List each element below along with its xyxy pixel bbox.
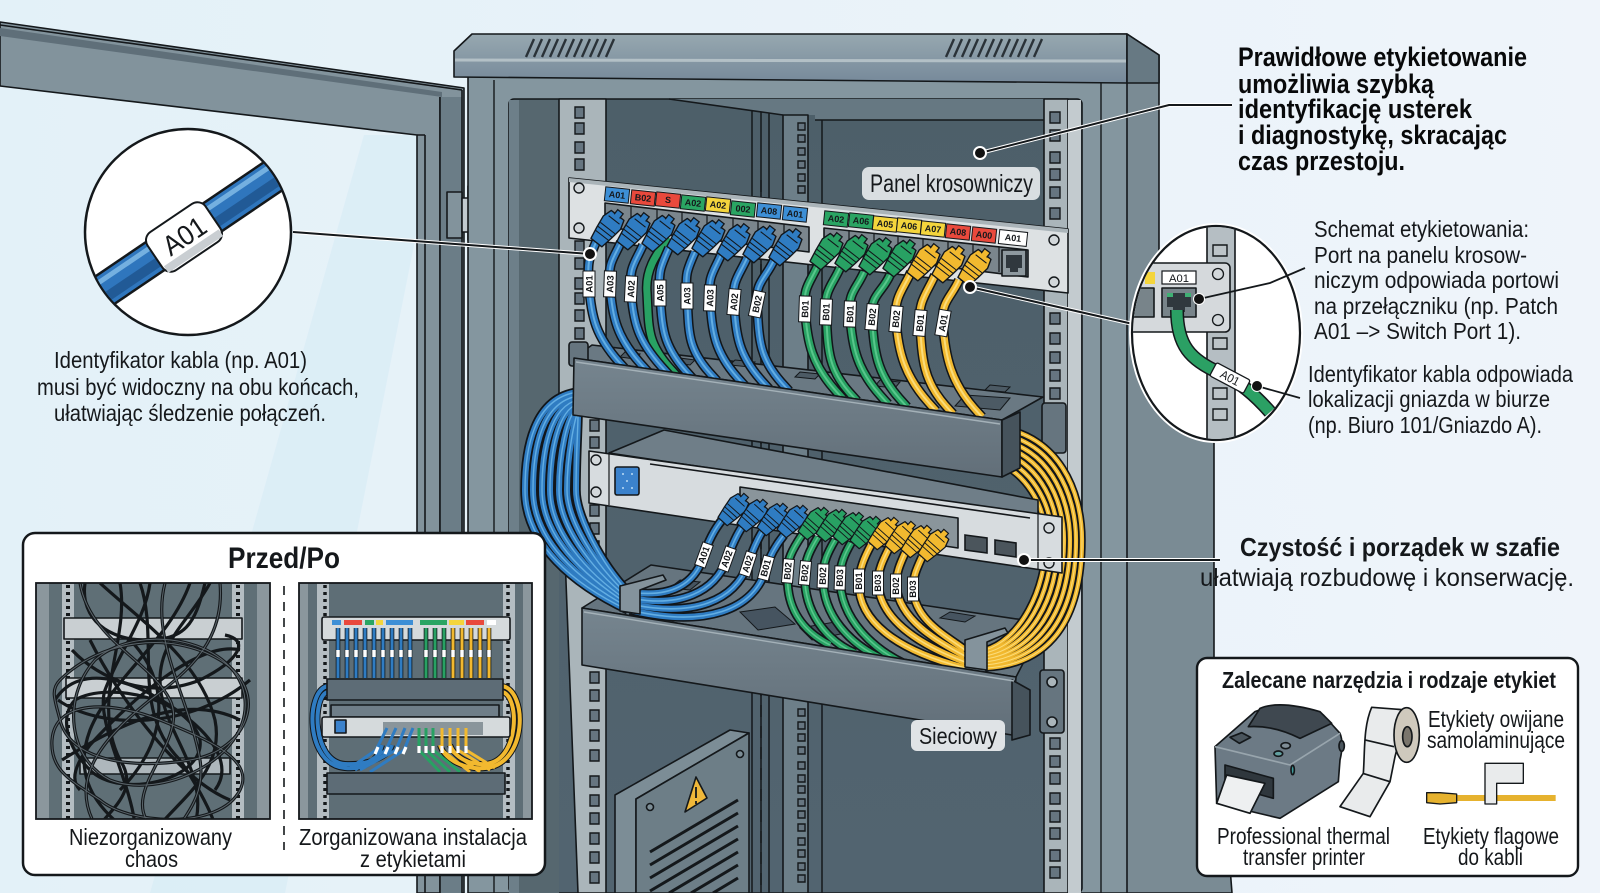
cable labels on switch cables: A02 (719, 549, 736, 569)
caption: after: z etykietami (360, 846, 466, 872)
heading: proper labelling: Prawidłowe etykietowanie (1238, 42, 1527, 72)
upper cable manager tray (574, 345, 1043, 420)
port block (824, 228, 1028, 277)
patch cables: yellow (896, 272, 982, 417)
port labels: A01 (786, 208, 804, 220)
switch cables: yellow (859, 545, 965, 668)
port labels: A06 (852, 215, 870, 227)
cable labels on patch cables: A01 (584, 275, 595, 293)
cable labels on patch cables: B01 (915, 313, 927, 332)
patch cables: green (805, 265, 907, 407)
text: labelling scheme (1314, 216, 1559, 344)
text: cleanliness note: Czystość i porządek w szafie (1240, 532, 1560, 562)
cable labels on switch cables: B01 (854, 572, 865, 590)
yellow cable bundle (985, 428, 1082, 668)
caption: flag labels (1423, 823, 1559, 870)
cable labels on patch cables (583, 271, 952, 337)
cabinet top cap with vents (454, 34, 1159, 83)
cable labels on switch cables: B03 (908, 580, 919, 598)
cable strap left (620, 575, 666, 614)
cable labels on switch cables: A02 (741, 554, 756, 574)
text: cable identifier note: ułatwiając śledzenie połączeń. (54, 400, 326, 426)
heading: proper labelling: identyfikację usterek (1238, 94, 1473, 124)
caption: printer (1217, 823, 1390, 870)
heading: proper labelling (1238, 42, 1527, 176)
cable labels on patch cables: B02 (751, 295, 765, 314)
arrow: cable ID zoom leader (293, 232, 596, 260)
network switch top (609, 430, 1038, 517)
cable labels on patch cables: A03 (682, 287, 693, 305)
cable labels on switch cables: B03 (835, 569, 846, 587)
icon: flag label on cable (1427, 763, 1556, 804)
cable labels on switch cables: B03 (873, 574, 884, 592)
cable strap right (965, 628, 1008, 670)
blue cable bundle (525, 392, 628, 610)
port labels: A02 (827, 213, 845, 225)
cable labels on switch cables: A01 (696, 544, 713, 565)
port labels: A06 (900, 220, 918, 232)
port tag: A01 (1169, 273, 1189, 285)
cable labels on switch cables: B02 (799, 564, 812, 582)
glass door reflection (150, 135, 417, 893)
cable sleeve (142, 198, 226, 276)
port block (605, 203, 809, 252)
cable labels on patch cables: B01 (845, 304, 857, 323)
cable labels on switch cables: B02 (891, 577, 902, 595)
cable tag: A01 (1218, 367, 1242, 389)
cable labels on patch cables: A02 (729, 293, 741, 311)
text: cable identifier mapping: lokalizacji gniazda w biurze (1308, 386, 1550, 412)
port labels (604, 187, 1028, 246)
patch panel (569, 178, 1068, 293)
caption: before: chaos (125, 846, 178, 872)
label: Panel krosowniczy: Panel krosowniczy (870, 170, 1033, 198)
caption: flag labels: do kabli (1458, 844, 1523, 870)
power unit with warning sign (615, 730, 749, 893)
image: organized rack (299, 583, 532, 819)
callout circle: cable label detail (76, 129, 306, 335)
port labels: A07 (924, 223, 942, 235)
arrow: port leader (1194, 268, 1305, 304)
caption: after: Zorganizowana instalacja (299, 824, 527, 850)
cable labels on patch cables: B01 (800, 299, 812, 318)
icon: label roll (1340, 707, 1419, 817)
cabinet front frame (468, 75, 1127, 893)
caption: flag labels: Etykiety flagowe (1423, 823, 1559, 849)
open cabinet door (0, 22, 464, 893)
switch cables: blue (630, 520, 784, 617)
cable labels on switch cables: B02 (782, 562, 795, 580)
patch panel connectors (588, 205, 996, 288)
port labels: A05 (876, 218, 894, 230)
cable labels on patch cables: A01 (937, 313, 951, 333)
arrow: port zoom leader (964, 281, 1133, 324)
caption: printer: Professional thermal (1217, 823, 1390, 849)
text: cleanliness note: ułatwiają rozbudowę i konserwację. (1200, 564, 1574, 592)
upper cable manager front (573, 358, 1020, 477)
text: cable identifier mapping: (np. Biuro 101/Gniazdo A). (1308, 412, 1542, 438)
cabinet interior (509, 99, 1082, 893)
heading: proper labelling: czas przestoju. (1238, 146, 1405, 176)
caption: before: Niezorganizowany (69, 824, 232, 850)
text: labelling scheme: Schemat etykietowania: (1314, 216, 1529, 242)
cable tag (1210, 362, 1250, 394)
text: labelling scheme: na przełączniku (np. Patch (1314, 293, 1558, 319)
cable labels on patch cables: A02 (626, 280, 638, 298)
arrow: switch leader (1018, 554, 1220, 566)
cable labels on switch cables: B02 (818, 567, 829, 585)
heading: proper labelling: umożliwia szybką (1238, 69, 1435, 99)
caption: wrap labels: samolaminujące (1427, 727, 1565, 753)
caption: printer: transfer printer (1243, 844, 1365, 870)
callout circle: port and cable detail (1125, 220, 1301, 445)
cable labels on patch cables: B02 (891, 310, 903, 328)
text: cable identifier mapping (1308, 361, 1573, 438)
switch connectors (715, 489, 953, 564)
port labels: S (664, 195, 672, 205)
empty RJ45 port (1002, 250, 1026, 276)
heading: proper labelling: i diagnostykę, skracając (1238, 120, 1507, 150)
text: cable identifier note (37, 347, 359, 426)
cable labels on patch cables: A03 (705, 289, 717, 307)
lower cable manager front (582, 608, 1030, 740)
switch port block (740, 487, 958, 548)
panel: before and after (23, 533, 545, 875)
icon: door hinge (447, 186, 488, 240)
port dividers (631, 206, 999, 272)
screws (591, 455, 1054, 568)
rack rails (559, 99, 1081, 893)
label: Sieciowy: Sieciowy (919, 723, 997, 749)
icon: switch status logo (615, 467, 639, 495)
right manager bracket (1042, 403, 1066, 453)
text: labelling scheme: A01 –> Switch Port 1). (1314, 318, 1521, 344)
port labels: A02 (709, 199, 727, 211)
icon: thermal printer (1215, 705, 1344, 818)
port labels: A02 (684, 197, 702, 209)
port labels: A01 (608, 189, 626, 201)
text: cable identifier note: Identyfikator kabla (np. A01) (54, 347, 307, 373)
SFP ports (965, 535, 1016, 557)
cable labels on switch cables: B01 (759, 558, 774, 578)
lower manager bracket (1040, 670, 1064, 733)
caption: wrap labels (1427, 706, 1565, 753)
caption: wrap labels: Etykiety owijane (1428, 706, 1564, 732)
port labels: A08 (760, 205, 778, 217)
port labels: 002 (735, 203, 751, 215)
port labels: A01 (1004, 232, 1022, 244)
cable labels on patch cables: A03 (605, 275, 617, 293)
heading: tools: Zalecane narzędzia i rodzaje etykiet (1222, 667, 1556, 693)
port labels: A00 (975, 229, 993, 241)
cable labels on patch cables: B01 (821, 302, 833, 321)
panel: recommended tools (1197, 658, 1578, 876)
text: cleanliness note (1200, 532, 1574, 592)
port labels: B02 (634, 192, 652, 204)
cable sleeve: A01 (157, 210, 212, 262)
text: labelling scheme: niczym odpowiada portowi (1314, 267, 1559, 293)
cable labels on patch cables: A05 (655, 284, 666, 302)
caption: after (299, 824, 527, 872)
arrow: top note leader (974, 105, 1232, 159)
network switch (589, 451, 1062, 573)
cabinet side panel (1100, 34, 1232, 893)
cable labels on patch cables: B02 (867, 308, 879, 326)
patch cables: blue (588, 240, 789, 391)
arrow: cable leader (1252, 380, 1300, 398)
switch cables: green (788, 535, 905, 664)
caption: before (69, 824, 232, 872)
text: cable identifier note: musi być widoczny na obu końcach, (37, 374, 359, 400)
text: labelling scheme: Port na panelu krosow- (1314, 242, 1527, 268)
screws (1212, 268, 1224, 326)
icon: warning triangle (685, 777, 707, 812)
cable labels on switch cables (695, 542, 919, 601)
screws (574, 183, 1059, 287)
divider (283, 586, 285, 850)
image: chaotic rack (36, 583, 270, 825)
patch cable behind: green (647, 238, 677, 376)
port tag (1162, 271, 1196, 285)
label: Panel krosowniczy (862, 167, 1040, 200)
lower cable manager tray (582, 565, 1044, 677)
heading: before/after: Przed/Po (228, 542, 340, 575)
left manager bracket (569, 342, 588, 366)
port labels: A08 (949, 226, 967, 238)
